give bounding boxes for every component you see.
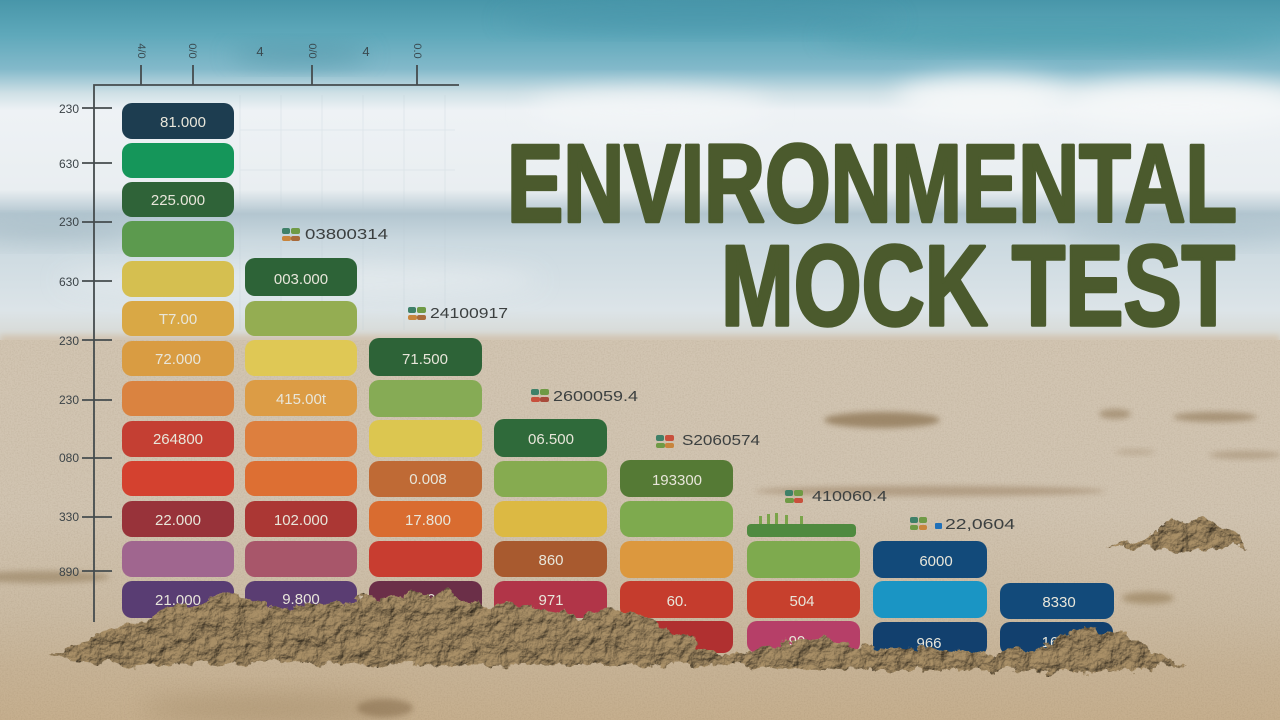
chart axes with ticks and labels xyxy=(59,43,459,622)
bar column 1: T7.00 xyxy=(159,311,197,328)
bar column 3: 0.008 xyxy=(409,471,447,488)
bar column 3 xyxy=(369,305,508,613)
bar column 7 xyxy=(873,516,1015,656)
chart axes with ticks and labels: 630 xyxy=(59,275,79,289)
bar column 5: 60. xyxy=(667,593,687,610)
chart axes with ticks and labels: 230 xyxy=(59,393,79,407)
sand mound covering the bars xyxy=(46,590,1184,672)
chart axes with ticks and labels: 330 xyxy=(59,510,79,524)
bar column 1 xyxy=(122,103,234,618)
bar column 3: 71.500 xyxy=(402,351,448,368)
value caption: column 2: 03800314 xyxy=(305,226,388,243)
bar column 4 xyxy=(494,388,638,618)
bar column 4: 971 xyxy=(538,592,564,609)
bar column 1: 22.000 xyxy=(155,512,201,529)
chart axes with ticks and labels: 630 xyxy=(59,157,79,171)
bar column 6 xyxy=(747,488,887,653)
bar column 8: 8330 xyxy=(1042,594,1076,611)
chart axes with ticks and labels: 080 xyxy=(59,451,79,465)
chart axes with ticks and labels: 4/0 xyxy=(135,43,147,59)
value caption: column 7: 22,0604 xyxy=(945,516,1015,533)
value caption: column 7 xyxy=(910,516,1015,533)
bar column 8 xyxy=(1000,583,1114,655)
value caption: column 5: S2060574 xyxy=(682,432,760,449)
background: sand beach xyxy=(0,335,1280,720)
value caption: column 4 xyxy=(531,388,638,405)
chart axes with ticks and labels: 230 xyxy=(59,215,79,229)
chart axes with ticks and labels: 4 xyxy=(256,44,264,59)
chart axes with ticks and labels: 230 xyxy=(59,334,79,348)
bar column 2: 9.800 xyxy=(282,591,320,608)
bar column 5: 193300 xyxy=(652,472,702,489)
bar column 4: 860 xyxy=(538,552,564,569)
bar column 2: 102.000 xyxy=(274,512,328,529)
chart axes with ticks and labels: 0/0 xyxy=(186,43,198,59)
chart axes with ticks and labels: 0/0 xyxy=(306,43,318,59)
bar column 7: 966 xyxy=(916,635,942,652)
value caption: column 2 xyxy=(282,226,388,243)
value caption: column 3 xyxy=(408,305,508,322)
chart axes with ticks and labels: 890 xyxy=(59,565,79,579)
value caption: column 6 xyxy=(785,488,887,505)
bar column 3: 17.800 xyxy=(405,512,451,529)
title xyxy=(507,122,1237,350)
bar column 6: 90. xyxy=(789,633,809,650)
bar column 2: 415.00t xyxy=(276,391,327,408)
bar column 2: 003.000 xyxy=(274,271,328,288)
bar column 1: 225.000 xyxy=(151,192,205,209)
bar column 1: 21.000 xyxy=(155,592,201,609)
bar column 1: 81.000 xyxy=(160,114,206,131)
bar column 5 xyxy=(620,432,760,653)
bar column 8: 16 xyxy=(1042,634,1058,651)
bar column 3: 02.00 xyxy=(406,591,444,608)
value caption: column 3: 24100917 xyxy=(430,305,508,322)
bar column 4: 06.500 xyxy=(528,431,574,448)
bar column 7: 6000 xyxy=(919,553,953,570)
value caption: column 6: 410060.4 xyxy=(812,488,887,505)
chart axes with ticks and labels: 230 xyxy=(59,102,79,116)
value caption: column 5 xyxy=(656,432,760,449)
bar column 2 xyxy=(245,226,388,616)
value caption: column 4: 2600059.4 xyxy=(553,388,638,405)
bar column 6: 504 xyxy=(789,593,815,610)
background: blurred sea and waves xyxy=(0,0,1280,345)
bar column 1: 72.000 xyxy=(155,351,201,368)
chart axes with ticks and labels: 4 xyxy=(362,44,370,59)
bar column 1: 264800 xyxy=(153,431,203,448)
chart axes with ticks and labels: 0.0 xyxy=(411,43,423,59)
